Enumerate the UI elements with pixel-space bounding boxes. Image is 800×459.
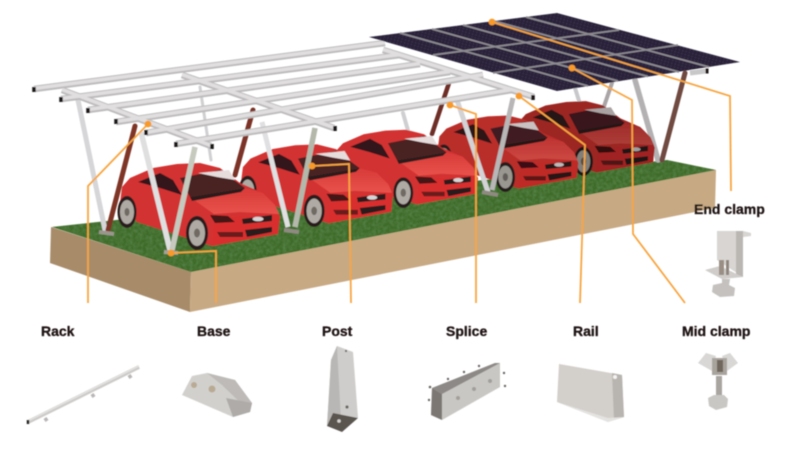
ground block xyxy=(50,160,716,312)
part: mid clamp xyxy=(698,353,738,410)
label: Splice: Splice xyxy=(446,323,487,339)
leader line: post xyxy=(309,163,351,303)
car 1 xyxy=(118,163,280,250)
car 3 xyxy=(332,130,478,208)
leader line: splice xyxy=(447,102,476,303)
solar panels xyxy=(369,13,740,91)
label: Mid clamp: Mid clamp xyxy=(682,323,750,339)
leader line: rail xyxy=(516,93,585,303)
car 2 xyxy=(239,144,393,227)
roof frame: rails and beams xyxy=(34,42,707,149)
label: Rack: Rack xyxy=(41,323,75,339)
leader line: mid clamp xyxy=(569,65,685,303)
part: splice xyxy=(428,363,506,420)
leader line: base xyxy=(168,250,216,303)
leader line: end clamp xyxy=(489,19,731,191)
middle post group xyxy=(457,98,513,195)
label: Rail: Rail xyxy=(573,323,599,339)
part: post xyxy=(327,346,358,432)
part: rail xyxy=(557,364,624,422)
part: rack xyxy=(28,366,139,424)
part: base xyxy=(182,373,252,417)
rear posts xyxy=(78,73,685,230)
car 5 xyxy=(515,101,655,176)
front post group xyxy=(99,132,195,253)
label: End clamp: End clamp xyxy=(694,201,765,217)
part: end clamp xyxy=(705,231,751,297)
car 4 xyxy=(435,115,578,192)
label: Post: Post xyxy=(322,323,353,339)
label: Base: Base xyxy=(197,323,231,339)
leader line: rack xyxy=(88,121,151,303)
second post group xyxy=(262,122,315,232)
